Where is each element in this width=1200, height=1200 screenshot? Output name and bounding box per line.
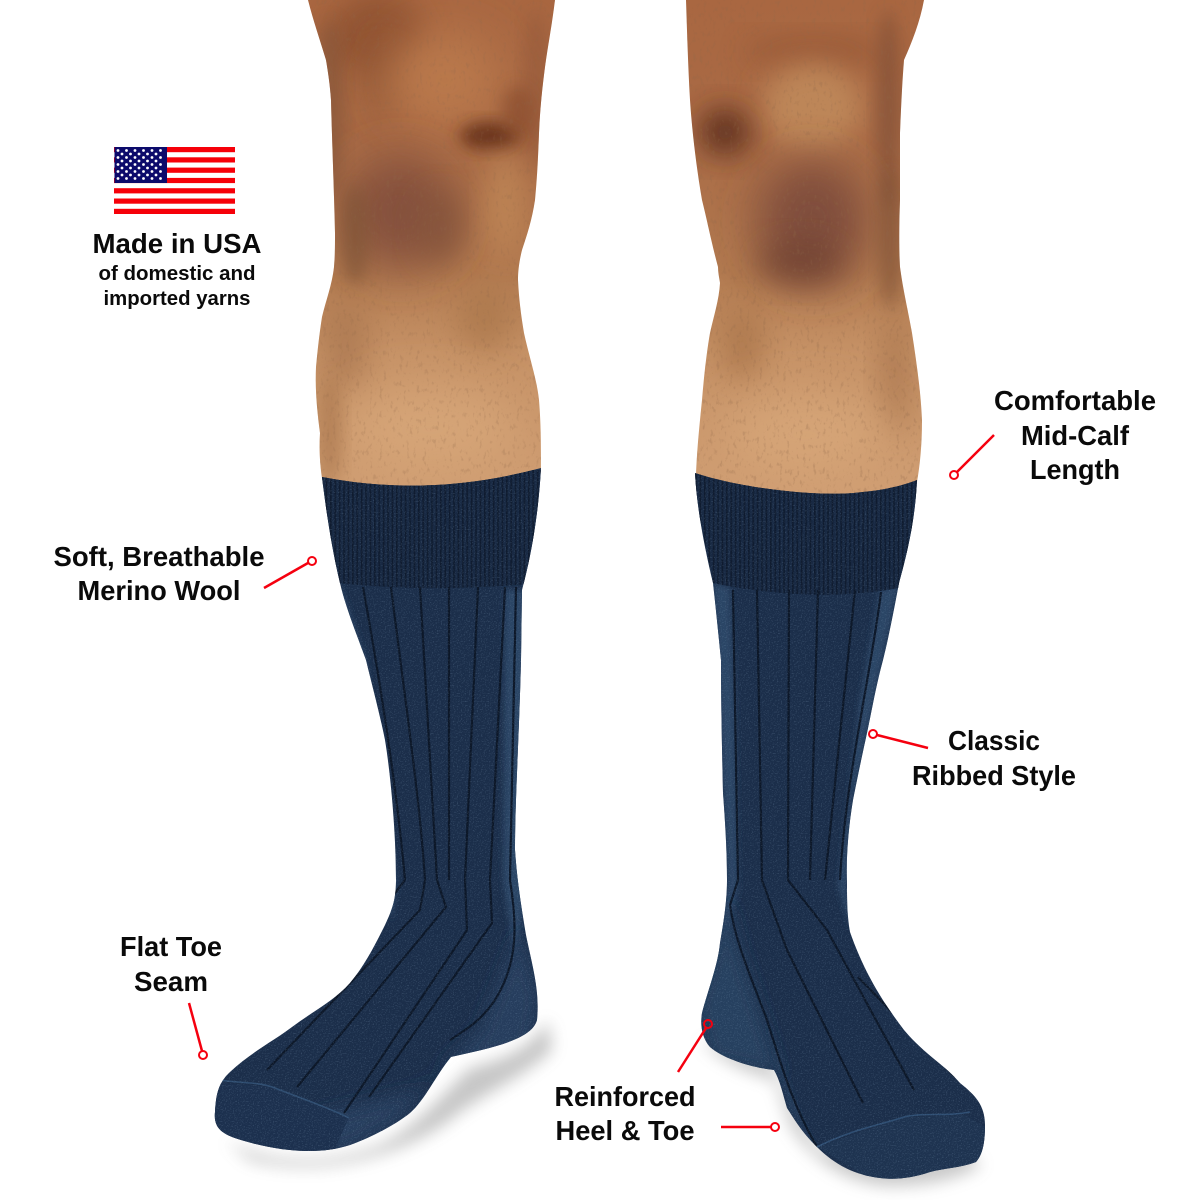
callout: Classic Ribbed Style: Ribbed Style: [912, 760, 1076, 791]
callout: Classic Ribbed Style: [869, 725, 1076, 791]
callout: Comfortable Mid-Calf Length: Mid-Calf: [1021, 420, 1130, 451]
callout: Reinforced Heel & Toe: Heel & Toe: [556, 1115, 694, 1146]
callout: Comfortable Mid-Calf Length: Comfortable: [994, 385, 1156, 416]
sock ribs: [241, 587, 516, 1113]
sock cuff: [315, 470, 545, 588]
toe: [214, 1082, 348, 1151]
text: Made in USA: imported yarns: [104, 287, 250, 310]
text: Made in USA: [92, 228, 262, 310]
heel: [701, 908, 776, 1074]
callout: Classic Ribbed Style: Classic: [948, 725, 1040, 756]
callout: Comfortable Mid-Calf Length: Length: [1030, 454, 1120, 485]
callout: Reinforced Heel & Toe: Reinforced: [554, 1081, 696, 1112]
text: Made in USA: of domestic and: [98, 262, 256, 285]
toe seam: [817, 1112, 970, 1147]
text: Made in USA: Made in USA: [92, 228, 262, 259]
callout: Soft, Breathable Merino Wool: Soft, Breathable: [54, 541, 264, 572]
callout: Reinforced Heel & Toe: [554, 1020, 779, 1146]
toe seam: [218, 1080, 349, 1118]
sock ribs: [730, 590, 955, 1147]
right leg: [680, 0, 930, 500]
callout: Comfortable Mid-Calf Length: [950, 385, 1156, 485]
sock cuff: [690, 470, 920, 595]
callout: Flat Toe Seam: [120, 931, 222, 1059]
callout: Soft, Breathable Merino Wool: Merino Wool: [78, 575, 240, 606]
sock edge highlights: [340, 583, 525, 960]
heel and sole shading: [329, 938, 538, 1150]
foot shadows: [225, 1020, 982, 1186]
right sock: [695, 473, 985, 1179]
callout: Flat Toe Seam: Flat Toe: [120, 931, 222, 962]
callout: Soft, Breathable Merino Wool: [54, 541, 316, 606]
sock edge highlights: [713, 583, 899, 950]
left sock: [214, 468, 541, 1151]
icon: American flag: [114, 147, 235, 214]
left leg: [300, 0, 560, 495]
toe: [817, 1128, 985, 1179]
callout: Flat Toe Seam: Seam: [134, 966, 208, 997]
